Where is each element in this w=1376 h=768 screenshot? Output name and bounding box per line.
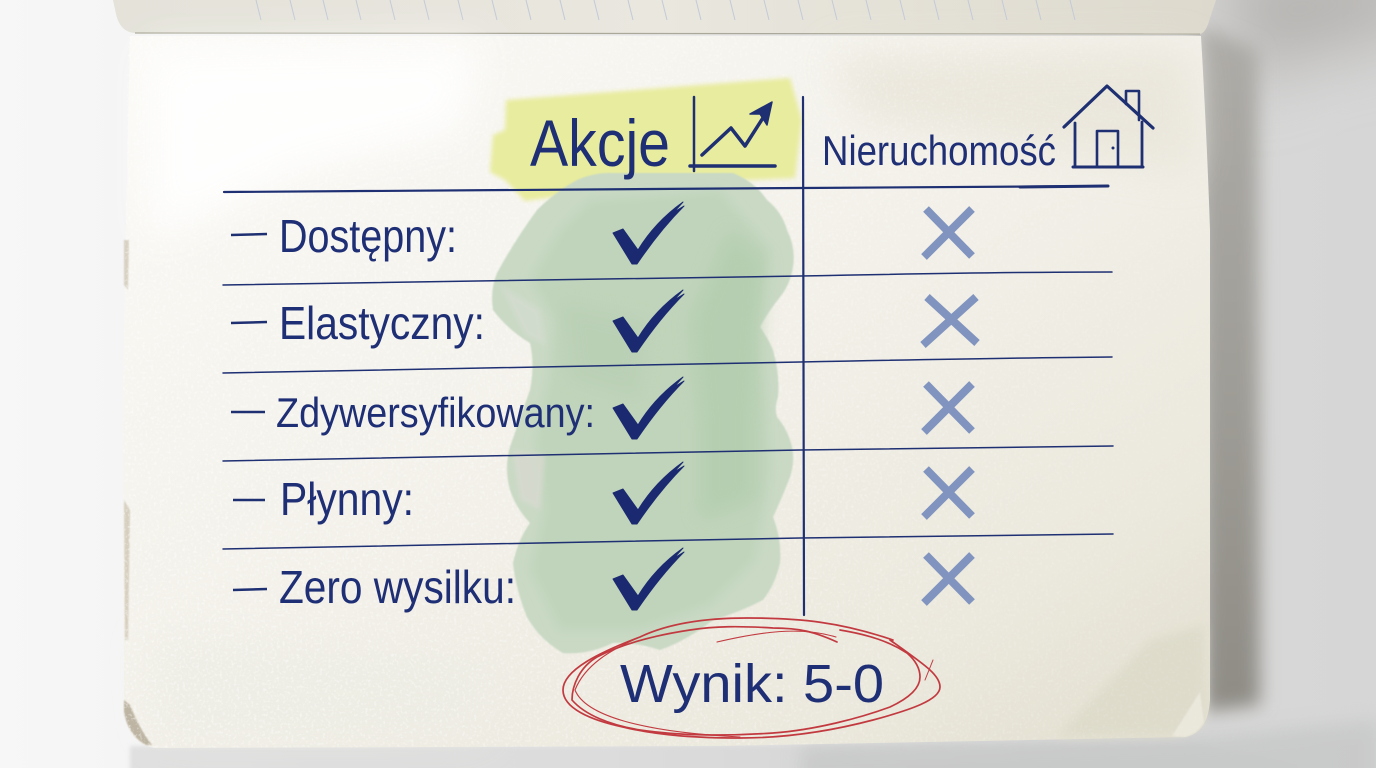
heading: Nieruchomość: Nieruchomość: [822, 127, 1056, 174]
notebook top page: [113, 0, 1216, 34]
green watercolour column: [492, 173, 794, 653]
score: Wynik 5-0: Wynik: 5-0: [620, 654, 884, 714]
notebook page: [123, 36, 1210, 748]
row 2: Elastyczny: Elastyczny:: [279, 297, 485, 349]
row 5: Zero wysilku: Zero wysilku:: [279, 561, 516, 613]
icon: rising chart: [690, 97, 775, 171]
row 4: Płynny: Płynny:: [280, 473, 414, 525]
icon: house: [1064, 86, 1153, 167]
row 1: Dostępny: Dostępny:: [279, 210, 457, 262]
table grid lines: [223, 97, 1113, 615]
yellow highlight behind Akcje: [490, 78, 802, 201]
row 3: Zdywersyfikowany: Zdywersyfikowany:: [276, 389, 595, 436]
heading: Akcje: Akcje: [530, 106, 670, 180]
check marks: Akcje column: [613, 202, 684, 610]
red hand-drawn ellipse around score: [563, 618, 940, 738]
paper grain texture: [124, 86, 970, 748]
cross marks: Nieruchomość column: [923, 209, 977, 603]
